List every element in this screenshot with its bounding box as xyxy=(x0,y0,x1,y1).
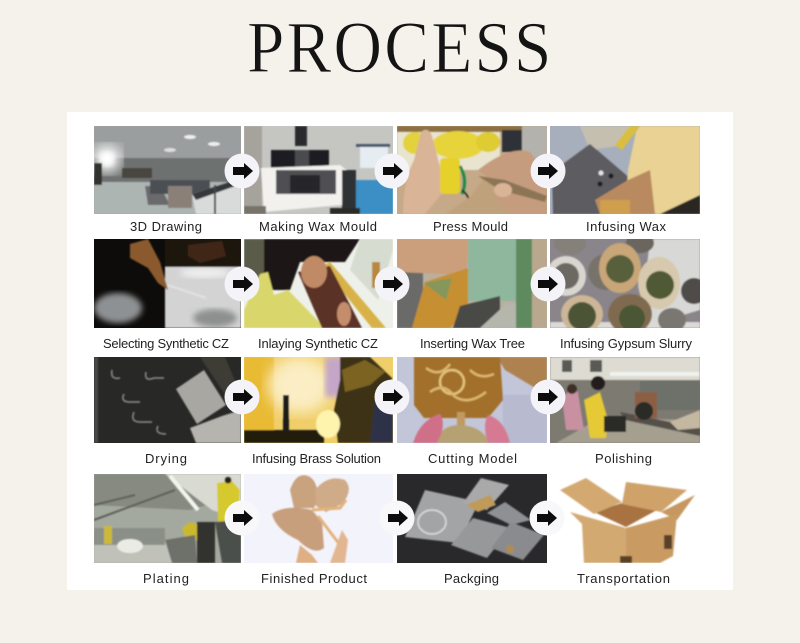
arrow: row 2 step 1 xyxy=(224,266,260,302)
label: Plating: Plating xyxy=(143,571,189,586)
label: Making Wax Mould: Making Wax Mould xyxy=(259,219,377,234)
photo: Drying xyxy=(94,357,241,443)
title: PROCESS xyxy=(247,7,554,89)
label: Infusing Brass Solution: Infusing Brass Solution xyxy=(252,451,381,466)
photo: Packging xyxy=(397,474,547,563)
label: Press Mould: Press Mould xyxy=(433,219,508,234)
arrow: row 3 step 1 xyxy=(224,380,260,414)
arrow: row 4 step 2 xyxy=(380,500,414,536)
photo: Transportation xyxy=(560,477,696,563)
photo: Polishing xyxy=(550,357,700,443)
photo: Inlaying Synthetic CZ xyxy=(244,239,393,328)
arrows: step connectors xyxy=(224,154,566,536)
label: Transportation: Transportation xyxy=(577,571,670,586)
label: Infusing Gypsum Slurry: Infusing Gypsum Slurry xyxy=(560,336,692,351)
photo: Infusing Gypsum Slurry xyxy=(550,239,700,328)
photo: Finished Product xyxy=(244,474,393,563)
photo: Infusing Brass Solution xyxy=(244,357,393,443)
label: 3D Drawing: 3D Drawing xyxy=(130,219,202,234)
arrow: row 3 step 3 xyxy=(530,380,566,414)
label: Packging: Packging xyxy=(444,571,499,586)
arrow: row 2 step 3 xyxy=(530,266,566,302)
photo: Infusing Wax xyxy=(550,126,700,214)
arrow: row 1 step 1 xyxy=(224,154,260,188)
photo: 3D Drawing xyxy=(93,126,241,214)
photo: Plating xyxy=(94,474,241,563)
label: Drying: Drying xyxy=(145,451,187,466)
arrow: row 4 step 3 xyxy=(530,500,564,536)
label: Inlaying Synthetic CZ: Inlaying Synthetic CZ xyxy=(258,336,378,351)
photo: Press Mould xyxy=(397,126,547,214)
arrow: row 4 step 1 xyxy=(224,500,260,536)
label: Finished Product: Finished Product xyxy=(261,571,367,586)
photo: Inserting Wax Tree xyxy=(397,239,547,328)
photo: Selecting Synthetic CZ xyxy=(94,239,241,328)
label: Selecting Synthetic CZ: Selecting Synthetic CZ xyxy=(103,336,229,351)
label: Cutting Model: Cutting Model xyxy=(428,451,517,466)
photo: Cutting Model xyxy=(397,357,547,443)
label: Inserting Wax Tree: Inserting Wax Tree xyxy=(420,336,525,351)
label: Infusing Wax: Infusing Wax xyxy=(586,219,666,234)
arrow: row 2 step 2 xyxy=(374,266,410,302)
arrow: row 3 step 2 xyxy=(374,380,410,414)
step labels xyxy=(103,219,692,586)
label: Polishing: Polishing xyxy=(595,451,652,466)
photo: Making Wax Mould xyxy=(244,126,393,214)
arrow: row 1 step 3 xyxy=(530,154,566,188)
arrow: row 1 step 2 xyxy=(374,154,410,188)
panel: process grid xyxy=(67,112,733,590)
